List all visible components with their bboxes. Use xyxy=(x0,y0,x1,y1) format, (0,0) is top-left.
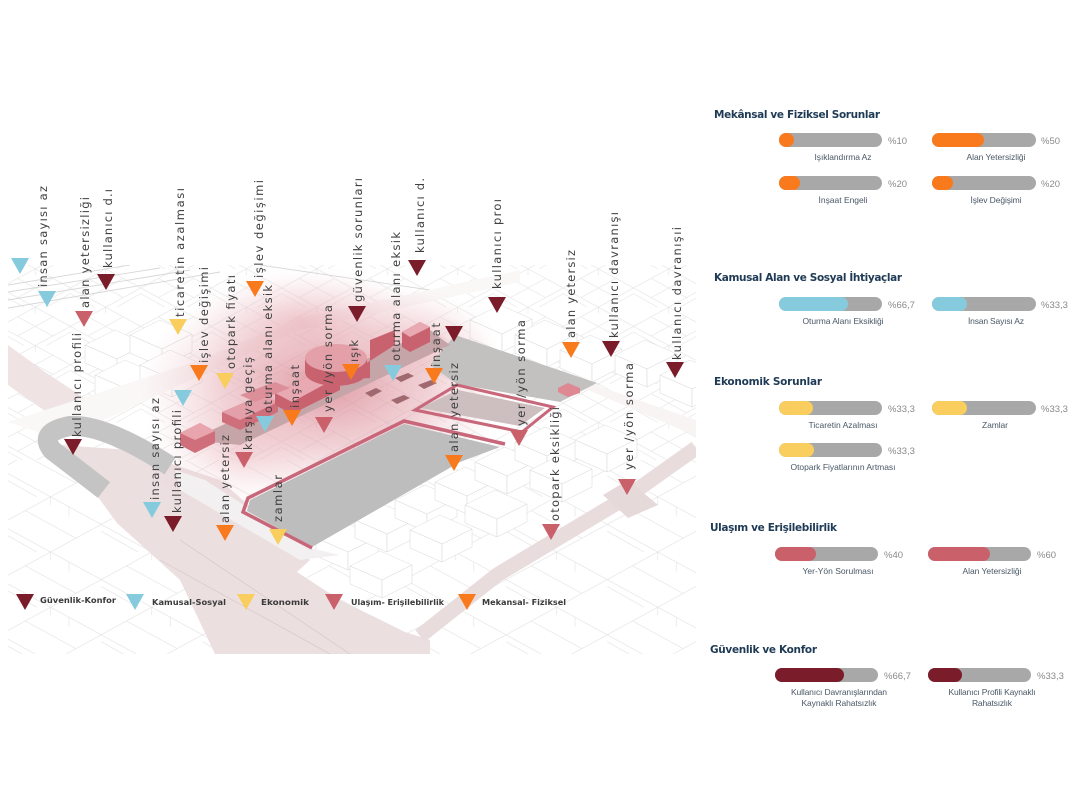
main roads xyxy=(8,270,696,654)
marker: alan yetersizliği xyxy=(75,197,93,327)
bar: ışıklandırma az: %10 xyxy=(888,136,907,147)
marker: kullanıcı davranışıi xyxy=(666,227,684,378)
marker: alan yetersiz xyxy=(216,435,234,541)
marker: insan sayısı az xyxy=(36,186,56,307)
marker: kullanıcı d.ı: kullanıcı d.ı xyxy=(101,189,115,268)
buildings west xyxy=(85,320,202,407)
legend xyxy=(16,594,566,610)
bar: alan yetersizliği: Alan Yetersizliği xyxy=(962,566,1022,576)
marker: zamlar xyxy=(269,475,287,545)
marker: alan yetersiz 2: alan yetersiz xyxy=(447,363,461,452)
marker: ışık xyxy=(342,340,361,380)
heading: Ekonomik Sorunlar xyxy=(714,376,823,388)
marker: insan sayısı az 2 xyxy=(143,398,162,518)
marker: inşaat xyxy=(283,365,302,426)
panel: güvenlik ve konfor xyxy=(710,644,1064,708)
small pink building xyxy=(558,383,580,397)
bar: kullanıcı profili: Kullanıcı Profili Kaynaklı xyxy=(948,687,1036,697)
bar: kullanıcı profili xyxy=(928,668,1064,708)
marker: güvenlik sorunları: güvenlik sorunları xyxy=(351,178,365,302)
heading: Mekânsal ve Fiziksel Sorunlar xyxy=(714,109,881,121)
bar: oturma alanı eksikliği xyxy=(779,297,915,326)
bar: insan sayısı az xyxy=(932,297,1068,326)
bar: ışıklandırma az xyxy=(779,133,907,162)
marker: alan yetersizliği: alan yetersizliği xyxy=(78,197,92,308)
bar: ışıklandırma az: Işıklandırma Az xyxy=(814,152,872,162)
marker: otopark fiyatı xyxy=(216,275,238,389)
bar: alan yetersizliği xyxy=(932,133,1060,162)
marker: işlev değişimi 2: işlev değişimi xyxy=(252,180,266,278)
bar: otopark fiyatlarının artması xyxy=(779,443,915,472)
bar: kullanıcı davranışları: Kaynaklı Rahatsızlık xyxy=(802,698,877,708)
marker: yer / yön sorma 2: yer /yön sorma xyxy=(514,320,528,426)
marker: alan yetersiz 3 xyxy=(562,250,580,358)
bar: alan yetersizliği: Alan Yetersizliği xyxy=(966,152,1026,162)
marker: oturma alanı eksik xyxy=(256,285,275,432)
pink buildings xyxy=(180,322,430,453)
marker: ışık: ışık xyxy=(347,340,361,362)
marker: kullanıcı profili xyxy=(64,333,84,455)
marker: kullanıcı profili 2: kullanıcı profili xyxy=(170,410,184,513)
bar: ticaretin azalması xyxy=(779,401,915,430)
curved gray track xyxy=(48,426,170,490)
marker: inşaat: inşaat xyxy=(288,365,302,408)
bar: kullanıcı profili: Rahatsızlık xyxy=(972,698,1013,708)
marker: oturma alanı eksik 2 xyxy=(384,232,403,381)
bar: yer-yön sorulması: Yer-Yön Sorulması xyxy=(802,566,874,576)
marker: alan yetersiz 3: alan yetersiz xyxy=(564,250,578,338)
bar: işlev değişimi xyxy=(932,176,1060,205)
bar: ticaretin azalması: %33,3 xyxy=(888,404,915,415)
panel: ulaşım ve erişilebilirlik xyxy=(710,522,1056,576)
marker: otopark eksikliği: otopark eksikliği xyxy=(548,407,562,521)
bar: kullanıcı profili: %33,3 xyxy=(1037,671,1064,682)
marker: karşıya geçiş xyxy=(235,357,255,468)
heading: Güvenlik ve Konfor xyxy=(710,644,818,656)
marker: inşaat 2 xyxy=(425,323,443,384)
legend: güvenlik-konfor xyxy=(16,594,116,610)
marker: ticaretin azalması: ticaretin azalması xyxy=(173,188,187,317)
marker: oturma alanı eksik: oturma alanı eksik xyxy=(261,285,275,413)
bar: işlev değişimi: %20 xyxy=(1041,179,1060,190)
bar: inşaat engeli xyxy=(779,176,907,205)
marker: insan sayısı az: insan sayısı az xyxy=(36,186,50,287)
legend: ekonomik: Ekonomik xyxy=(261,598,310,607)
bar: oturma alanı eksikliği: %66,7 xyxy=(888,300,915,311)
marker: alan yetersiz 2 xyxy=(445,363,463,471)
marker: inşaat 2: inşaat xyxy=(429,323,443,367)
marker: otopark eksikliği xyxy=(542,407,562,540)
bar: otopark fiyatlarının artması: %33,3 xyxy=(888,446,915,457)
street lines north-west xyxy=(8,265,430,308)
bar: inşaat engeli: İnşaat Engeli xyxy=(818,195,868,205)
buildings north-east xyxy=(470,306,696,408)
buildings along plaza south edge xyxy=(316,425,637,598)
panel: ekonomik sorunlar xyxy=(714,376,1068,472)
marker: alan yetersiz: alan yetersiz xyxy=(218,435,232,523)
marker: güvenlik sorunları xyxy=(348,178,366,322)
marker: işlev değişimi xyxy=(190,267,211,381)
marker: kullanıcı d.: kullanıcı d. xyxy=(413,178,427,253)
panel: kamusal alan ve sosyal ihtiyaçlar xyxy=(714,270,1068,326)
bar: işlev değişimi: İşlev Değişimi xyxy=(970,195,1022,205)
panel: mekânsal ve fiziksel sorunlar xyxy=(714,109,1060,205)
ground haze xyxy=(162,279,490,492)
map markers xyxy=(11,178,684,545)
heading: Kamusal Alan ve Sosyal İhtiyaçlar xyxy=(714,270,903,284)
north urban texture xyxy=(8,265,696,460)
bar: zamlar: %33,3 xyxy=(1041,404,1068,415)
marker: kullanıcı proı xyxy=(488,199,506,313)
bar: ticaretin azalması: Ticaretin Azalması xyxy=(808,420,878,430)
infographic canvas xyxy=(8,109,1068,708)
marker: karşıya geçiş: karşıya geçiş xyxy=(241,357,255,450)
bar: zamlar xyxy=(932,401,1068,430)
marker: kullanıcı davranışı: kullanıcı davranışı xyxy=(607,212,621,338)
legend: güvenlik-konfor: Güvenlik-Konfor xyxy=(40,596,116,605)
marker: kullanıcı profili: kullanıcı profili xyxy=(70,333,84,437)
bar: kullanıcı davranışları: %66,7 xyxy=(884,671,911,682)
legend: mekansal-fiziksel xyxy=(458,594,566,610)
legend: kamusal-sosyal: Kamusal-Sosyal xyxy=(152,598,226,607)
bar: yer-yön sorulması xyxy=(775,547,903,576)
bar: oturma alanı eksikliği: Oturma Alanı Eksikliği xyxy=(802,316,884,326)
marker: zamlar: zamlar xyxy=(271,475,285,522)
site map xyxy=(8,265,722,654)
marker: yer / yön sorma xyxy=(315,305,335,433)
marker: oturma alanı eksik 2: oturma alanı eksik xyxy=(389,232,403,361)
marker: işlev değişimi 2 xyxy=(246,180,266,297)
bar: kullanıcı davranışları: Kullanıcı Davranışlarından xyxy=(791,687,887,697)
marker: kullanıcı davranışıi: kullanıcı davranışıi xyxy=(670,227,684,360)
marker: kullanıcı davranışı xyxy=(602,212,621,357)
bar: inşaat engeli: %20 xyxy=(888,179,907,190)
bar: alan yetersizliği: %60 xyxy=(1037,550,1056,561)
legend: ulaşım-erişilebilirlik xyxy=(325,594,445,610)
bar: kullanıcı davranışları xyxy=(775,668,911,708)
marker: kullanıcı d. xyxy=(408,178,427,276)
marker: kullanıcı proı: kullanıcı proı xyxy=(490,199,504,289)
main gray plaza xyxy=(243,421,505,548)
bar: insan sayısı az: İnsan Sayısı Az xyxy=(968,316,1024,326)
bar: zamlar: Zamlar xyxy=(982,420,1008,430)
marker: unlabelled blue xyxy=(11,258,29,274)
framed plaza xyxy=(415,385,553,432)
marker: unlabelled blue centre-left xyxy=(174,390,192,406)
roof squares xyxy=(365,373,437,404)
marker: otopark fiyatı: otopark fiyatı xyxy=(224,275,238,369)
marker: işlev değişimi: işlev değişimi xyxy=(197,267,211,363)
marker: yer / yön sorma 2 xyxy=(510,320,528,446)
upper gray plaza xyxy=(430,335,597,402)
marker: yer / yön sorma 3 xyxy=(618,363,636,495)
legend: ulaşım-erişilebilirlik: Ulaşım- Erişilebilirlik xyxy=(351,598,445,607)
bar: alan yetersizliği: %50 xyxy=(1041,136,1060,147)
legend: mekansal-fiziksel: Mekansal- Fiziksel xyxy=(482,598,566,607)
bar: otopark fiyatlarının artması: Otopark Fiyatlarının Artması xyxy=(790,462,896,472)
marker: yer / yön sorma 3: yer /yön sorma xyxy=(622,363,636,470)
bar: alan yetersizliği xyxy=(928,547,1056,576)
marker: kullanıcı d.ı xyxy=(97,189,115,290)
bar: insan sayısı az: %33,3 xyxy=(1041,300,1068,311)
marker: ticaretin azalması xyxy=(169,188,187,335)
central promenade band xyxy=(190,330,450,445)
legend: ekonomik xyxy=(237,594,310,610)
south urban texture xyxy=(8,460,696,654)
legend: kamusal-sosyal xyxy=(126,594,226,610)
bar: yer-yön sorulması: %40 xyxy=(884,550,903,561)
heading: Ulaşım ve Erişilebilirlik xyxy=(710,522,838,534)
pale square xyxy=(175,470,340,560)
marker: kullanıcı profili 2 xyxy=(164,410,184,532)
marker: unlabelled dark xyxy=(445,326,463,342)
marker: yer / yön sorma: yer /yön sorma xyxy=(321,305,335,412)
marker: insan sayısı az 2: insan sayısı az xyxy=(148,398,162,500)
